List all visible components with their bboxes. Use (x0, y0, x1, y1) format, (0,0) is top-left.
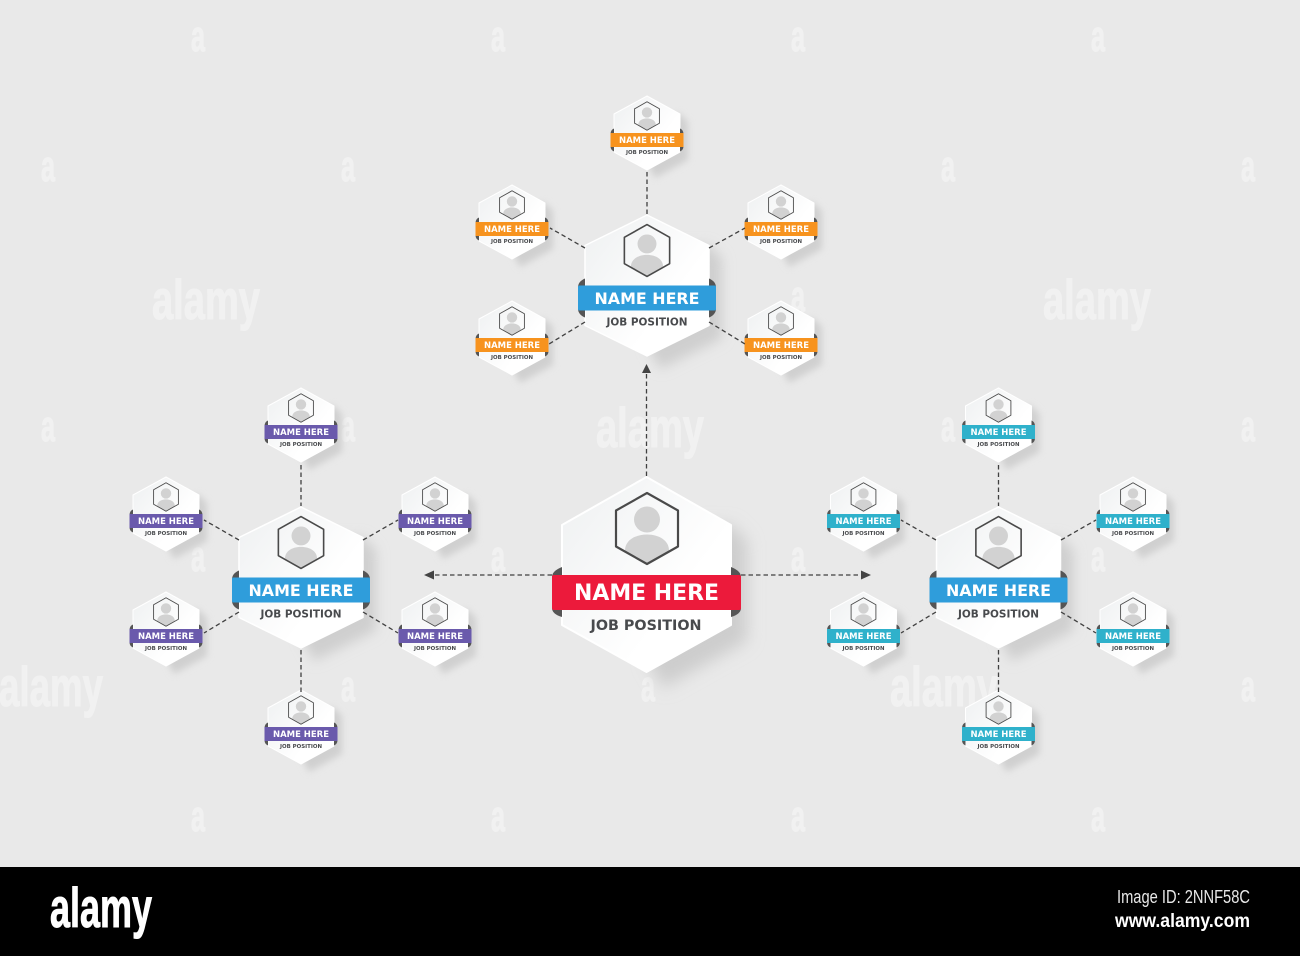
watermark pattern: a (941, 142, 955, 191)
icon: main avatar (616, 493, 678, 564)
watermark pattern: alamy (152, 268, 260, 331)
main job: JOB POSITION (589, 618, 702, 634)
footer bar (0, 867, 1300, 956)
left cluster: manager node: NAME HERE (248, 581, 354, 600)
right cluster: manager node: NAME HERE (946, 581, 1051, 600)
left cluster: staff bottom: NAME HERE (273, 730, 329, 740)
left cluster: staff lower left (130, 592, 207, 674)
watermark pattern: alamy (596, 396, 704, 459)
watermark pattern: a (791, 12, 805, 61)
left cluster: manager node: JOB POSITION (259, 608, 342, 620)
connectors: left cluster (204, 465, 398, 692)
top cluster: staff upper right: JOB POSITION (759, 239, 802, 245)
right cluster: staff upper left: NAME HERE (836, 517, 892, 527)
top cluster: staff upper right (744, 185, 822, 267)
top cluster: manager node (578, 215, 722, 369)
left cluster: staff upper right (398, 477, 476, 559)
top cluster: staff top (610, 96, 688, 178)
right cluster: staff upper right (1096, 477, 1174, 559)
main name banner (552, 575, 741, 610)
top cluster: manager node: NAME HERE (594, 289, 700, 308)
top cluster: staff lower right: NAME HERE (753, 341, 809, 351)
right cluster: staff upper left (827, 477, 904, 559)
top cluster: staff lower left: NAME HERE (484, 341, 540, 351)
left cluster: staff upper right: NAME HERE (407, 517, 463, 527)
footer logo: alamy (50, 876, 152, 939)
watermark pattern: a (1091, 532, 1105, 581)
left cluster: staff top: JOB POSITION (279, 442, 322, 448)
watermark pattern: a (1241, 662, 1255, 711)
footer url: www.alamy.com (1114, 911, 1250, 932)
right cluster: staff lower right (1096, 592, 1174, 674)
arrow: left to left cluster (424, 570, 552, 580)
connectors: top cluster (549, 172, 745, 344)
watermark pattern: a (191, 792, 205, 841)
watermark pattern: a (341, 402, 355, 451)
left cluster: staff top: NAME HERE (273, 428, 329, 438)
top cluster: manager node: JOB POSITION (605, 316, 688, 328)
top cluster: staff upper left: NAME HERE (484, 225, 540, 235)
right cluster: staff top: JOB POSITION (976, 442, 1020, 448)
watermark pattern: a (41, 402, 55, 451)
watermark pattern: alamy (0, 655, 103, 718)
right cluster: staff upper right: JOB POSITION (1111, 531, 1154, 537)
arrow: right to right cluster (741, 570, 871, 580)
top cluster: staff lower right: JOB POSITION (759, 355, 802, 361)
top cluster: staff lower right (744, 301, 822, 383)
connectors: right cluster (901, 465, 1096, 692)
right cluster: staff lower right: NAME HERE (1105, 632, 1161, 642)
left cluster: staff lower right: JOB POSITION (413, 646, 456, 652)
right cluster: manager node: JOB POSITION (957, 608, 1039, 620)
right cluster: staff top (962, 388, 1040, 470)
left cluster: staff upper left: NAME HERE (138, 517, 194, 527)
right cluster: staff lower right: JOB POSITION (1111, 646, 1154, 652)
watermark pattern: a (341, 662, 355, 711)
top cluster: staff upper left: JOB POSITION (490, 239, 533, 245)
watermark pattern: a (791, 792, 805, 841)
left cluster: staff lower right: NAME HERE (407, 632, 463, 642)
top cluster: staff top: NAME HERE (619, 136, 675, 146)
left cluster: staff lower right (398, 592, 476, 674)
top cluster: staff upper right: NAME HERE (753, 225, 809, 235)
right cluster: staff top: NAME HERE (970, 428, 1027, 438)
watermark pattern: a (941, 402, 955, 451)
right cluster: staff bottom: JOB POSITION (976, 744, 1020, 750)
watermark pattern: a (341, 142, 355, 191)
watermark pattern: a (1241, 142, 1255, 191)
watermark pattern: a (491, 792, 505, 841)
left cluster: staff upper right: JOB POSITION (413, 531, 456, 537)
left cluster: staff upper left (130, 477, 207, 559)
watermark pattern: a (1091, 792, 1105, 841)
watermark pattern: a (1091, 12, 1105, 61)
left cluster: staff lower left: NAME HERE (138, 632, 194, 642)
left cluster: manager node (232, 507, 376, 661)
watermark pattern: a (41, 142, 55, 191)
right cluster: staff lower left (827, 592, 904, 674)
right cluster: manager node (930, 507, 1074, 661)
right cluster: staff upper left: JOB POSITION (841, 531, 885, 537)
right cluster: staff bottom: NAME HERE (970, 730, 1027, 740)
watermark pattern: a (491, 532, 505, 581)
right cluster: staff lower left: NAME HERE (836, 632, 892, 642)
watermark pattern: a (791, 532, 805, 581)
left cluster: staff lower left: JOB POSITION (144, 646, 187, 652)
main name: NAME HERE (574, 581, 719, 606)
watermark pattern: a (191, 532, 205, 581)
top cluster: staff upper left (476, 185, 553, 267)
left cluster: staff top (264, 388, 342, 470)
watermark pattern: a (791, 272, 805, 321)
left cluster: staff upper left: JOB POSITION (144, 531, 187, 537)
right cluster: staff lower left: JOB POSITION (841, 646, 885, 652)
right cluster: staff bottom (962, 690, 1040, 772)
top cluster: staff top: JOB POSITION (625, 150, 668, 156)
watermark pattern: alamy (1043, 268, 1151, 331)
left cluster: staff bottom (264, 690, 342, 772)
watermark pattern: a (491, 12, 505, 61)
right cluster: staff upper right: NAME HERE (1105, 517, 1161, 527)
top cluster: staff lower left: JOB POSITION (490, 355, 533, 361)
top cluster: staff lower left (476, 301, 553, 383)
left cluster: staff bottom: JOB POSITION (279, 744, 322, 750)
watermark pattern: alamy (890, 655, 998, 718)
watermark pattern: a (641, 662, 655, 711)
main node (552, 477, 747, 688)
watermark pattern: a (1241, 402, 1255, 451)
watermark pattern: a (191, 12, 205, 61)
footer image id: Image ID: 2NNF58C (1117, 887, 1250, 907)
arrow: up to top cluster (642, 364, 651, 476)
